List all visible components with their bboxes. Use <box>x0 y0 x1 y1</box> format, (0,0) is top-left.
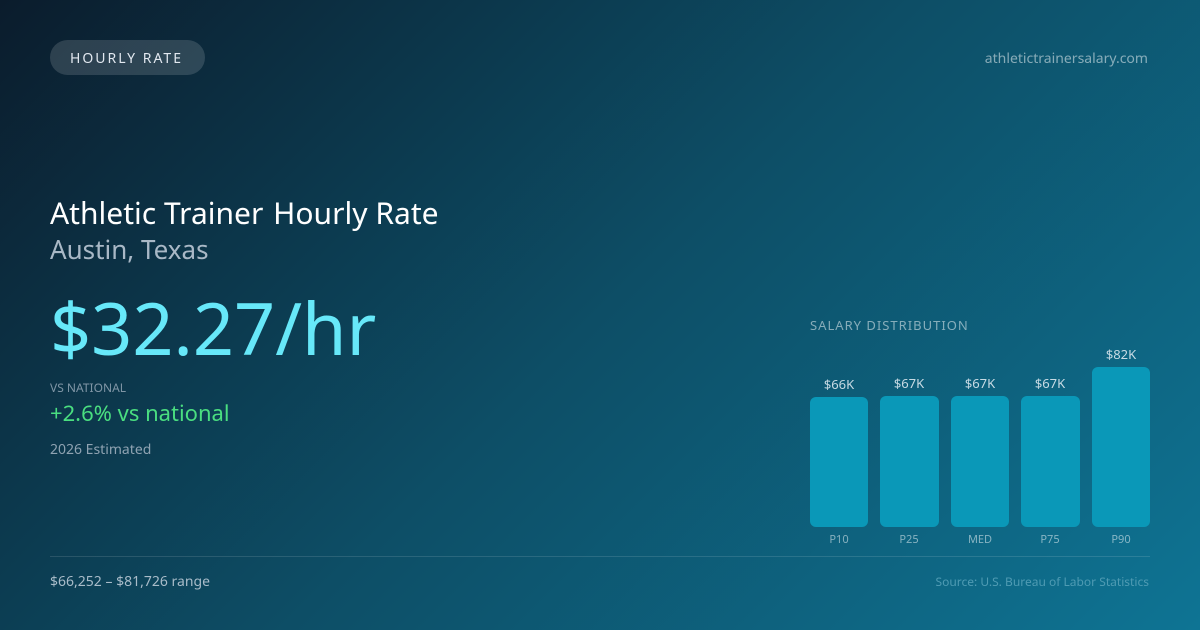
estimate note: 2026 Estimated <box>50 440 151 459</box>
chart: salary distribution <box>810 316 1150 547</box>
salary range: $66,252 – $81,726 range <box>50 572 210 591</box>
location subtitle: Austin, Texas <box>50 231 209 267</box>
hourly rate value: $32.27/hr <box>50 279 376 377</box>
bar median: $67K <box>965 374 995 392</box>
category pill <box>50 40 205 75</box>
bar median: MED <box>968 532 992 547</box>
source note: Source: U.S. Bureau of Labor Statistics <box>936 573 1149 590</box>
bar P75 <box>1021 374 1080 547</box>
bar P10: $66K <box>824 375 854 393</box>
bar P90: $82K <box>1106 345 1136 363</box>
category pill: HOURLY RATE <box>70 49 183 68</box>
bar median <box>951 374 1009 547</box>
bar P75: $67K <box>1035 374 1065 392</box>
comparison label: VS NATIONAL <box>50 379 126 396</box>
site domain: athletictrainersalary.com <box>985 49 1148 68</box>
bar P90: P90 <box>1111 532 1131 547</box>
comparison value: +2.6% vs national <box>50 398 230 428</box>
bar P25: $67K <box>894 374 924 392</box>
bar P10: P10 <box>829 532 849 547</box>
chart heading: SALARY DISTRIBUTION <box>810 316 969 334</box>
bar P75: P75 <box>1040 532 1060 547</box>
bar P25 <box>880 374 939 547</box>
bar P90 <box>1092 345 1150 547</box>
bar P10 <box>810 375 868 547</box>
bar P25: P25 <box>899 532 919 547</box>
title: Athletic Trainer Hourly Rate <box>50 192 439 233</box>
